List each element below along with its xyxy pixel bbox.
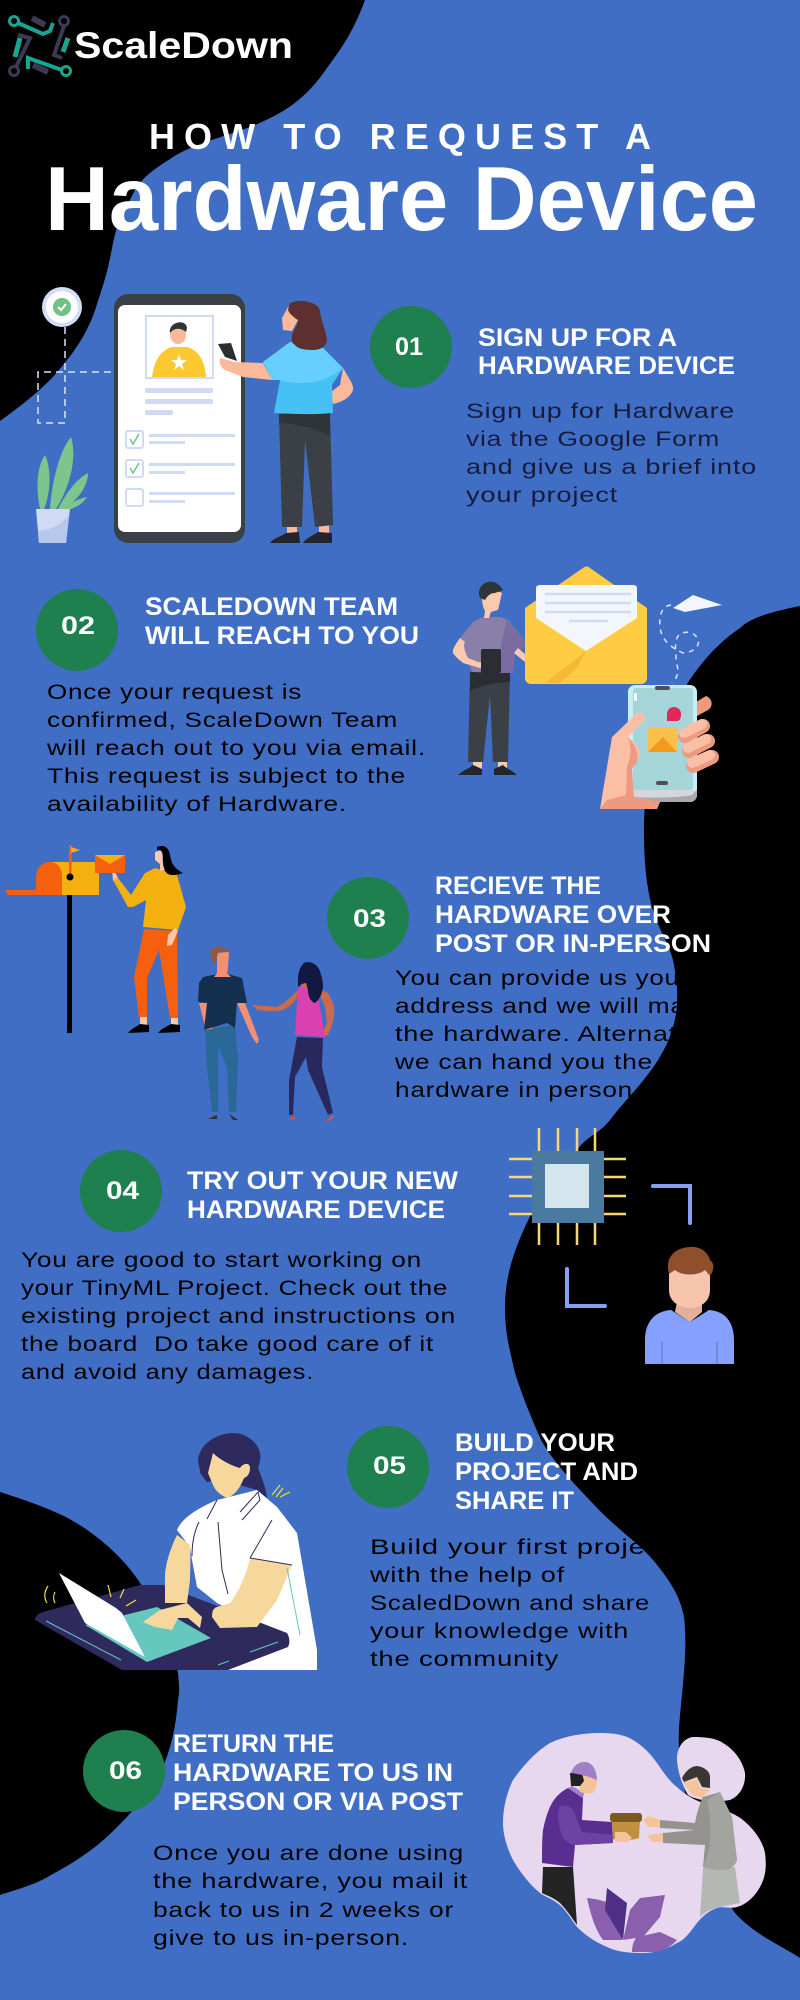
body text 4: You are good to start working on [21,1249,422,1272]
number badge 01: 01 [395,333,423,361]
heading 3: HARDWARE OVER [435,901,671,929]
body text 6: back to us in 2 weeks or [153,1899,454,1922]
mailbox on post [5,845,99,1033]
profile text lines [145,388,213,415]
icon: circuit logo mark [10,16,70,76]
woman's hair [198,1433,267,1498]
body text 5 [369,1536,670,1671]
shirt outlines and accents [192,1492,292,1594]
body text 2: will reach out to you via email. [46,737,426,760]
step 2 [36,589,426,816]
number badge 03 [327,877,409,959]
corner brackets [567,1186,690,1306]
body text 4: your TinyML Project. Check out the [21,1277,448,1300]
number badge 03: 03 [353,905,386,933]
heading 3: RECIEVE THE [435,872,601,900]
heading 2 [145,593,419,650]
number badge 04 [80,1150,162,1232]
body text 4: the board Do take good care of it [21,1333,434,1356]
paper plane with dashed trail [660,595,722,683]
illustration: man, envelope and phone [453,566,722,809]
body text 2: Once your request is [47,681,302,704]
illustration: hardware handover [503,1733,766,1953]
illustration: phone checklist and woman [36,287,353,543]
heading 5: BUILD YOUR [455,1429,615,1457]
envelope with letter [525,566,647,684]
dashed connector [38,327,114,423]
mail envelope [95,855,125,881]
body text 1: and give us a brief into [466,456,757,479]
number badge 02 [36,589,118,671]
illustration: chip and person [509,1128,734,1364]
step 1 [370,306,757,507]
man with tablet [453,582,546,775]
heading 3: POST OR IN-PERSON [435,930,711,958]
body text 5: ScaledDown and share [370,1592,650,1615]
body text 5: Build your first project [370,1536,670,1559]
body text 3: You can provide us your [395,967,689,990]
body text 5: with the help of [369,1564,565,1587]
heading 1: SIGN UP FOR A [478,324,677,352]
heading 1: HARDWARE DEVICE [478,352,735,380]
body text 5: the community [370,1648,559,1671]
woman in pink top [252,962,334,1121]
heading 2: SCALEDOWN TEAM [145,593,398,621]
illustration: woman at laptop [35,1433,317,1670]
number badge 02: 02 [61,612,95,640]
laptop screen [59,1573,145,1657]
woman's face [208,1453,250,1498]
step 5 [347,1426,670,1671]
hand [143,1603,202,1630]
heading 4 [187,1167,458,1224]
body text 2: availability of Hardware. [47,793,347,816]
body text 1: your project [466,484,618,507]
body text 1 [466,400,757,507]
icon: person avatar [645,1247,734,1364]
body text 2 [46,681,426,816]
touch pad [85,1607,211,1662]
number badge 05 [347,1426,429,1508]
background shape: right black blob [505,606,800,1958]
number badge 04: 04 [106,1177,139,1205]
step 3 [327,872,735,1102]
body text 3 [394,967,735,1102]
body text 6: give to us in-person. [153,1927,409,1950]
purple plant [587,1888,677,1952]
heading 4: HARDWARE DEVICE [187,1196,445,1224]
hand holding phone with message [600,685,712,809]
icon: potted plant [36,437,88,543]
woman posting letter [113,846,186,1033]
heading 6: HARDWARE TO US IN [173,1759,453,1787]
heading 1 [478,324,735,380]
body text 4: existing project and instructions on [21,1305,456,1328]
title: Hardware Device [45,149,758,250]
parcel box [610,1813,642,1842]
phone mockup [114,294,245,543]
body text 3: we can hand you the [394,1051,653,1074]
heading 4: TRY OUT YOUR NEW [187,1167,458,1195]
step 4 [21,1150,458,1384]
background shape: bottom-left black blob [0,1492,179,1895]
body text 3: the hardware. Alternatively [395,1023,735,1046]
woman's shirt [177,1490,317,1670]
logo: ScaleDown [10,16,293,76]
heading 5: PROJECT AND [455,1458,638,1486]
body text 6 [153,1842,468,1950]
body text 4: and avoid any damages. [21,1361,314,1384]
heading 6 [173,1730,463,1816]
title: HOW TO REQUEST A [149,116,651,157]
left arm [165,1535,190,1603]
body text 6: the hardware, you mail it [153,1870,468,1893]
logo wordmark: ScaleDown [74,25,293,66]
illustration: mailbox and people [5,845,334,1121]
lilac blob backdrop [503,1733,766,1953]
right arm [212,1558,292,1628]
heading 5: SHARE IT [455,1487,574,1515]
step 6 [83,1730,468,1950]
body text 2: This request is subject to the [47,765,406,788]
body text 2: confirmed, ScaleDown Team [47,709,398,732]
number badge 06 [83,1730,165,1812]
number badge 06: 06 [109,1757,142,1785]
number badge 01 [370,306,452,388]
delivery person in purple [542,1762,613,1925]
man in navy shirt [198,946,259,1120]
heading 2: WILL REACH TO YOU [145,622,419,650]
body text 1: via the Google Form [466,428,720,451]
body text 4 [21,1249,456,1384]
heading 6: PERSON OR VIA POST [173,1788,463,1816]
body text 3: address and we will mail [395,995,699,1018]
body text 6: Once you are done using [153,1842,464,1865]
profile picture [146,316,213,378]
checklist [126,431,235,506]
number badge 05: 05 [373,1452,406,1480]
background shape: top-left black blob [0,0,365,421]
body text 1: Sign up for Hardware [466,400,735,423]
heading 6: RETURN THE [173,1730,334,1758]
icon: microchip [509,1128,626,1245]
body text 3: hardware in person [395,1079,633,1102]
desk surface [35,1585,289,1670]
woman holding phone [218,301,353,543]
heading 5 [455,1429,638,1515]
heading 3 [435,872,711,958]
body text 5: your knowledge with [370,1620,629,1643]
receiver in grey [643,1766,740,1917]
icon: green check badge [42,287,82,327]
